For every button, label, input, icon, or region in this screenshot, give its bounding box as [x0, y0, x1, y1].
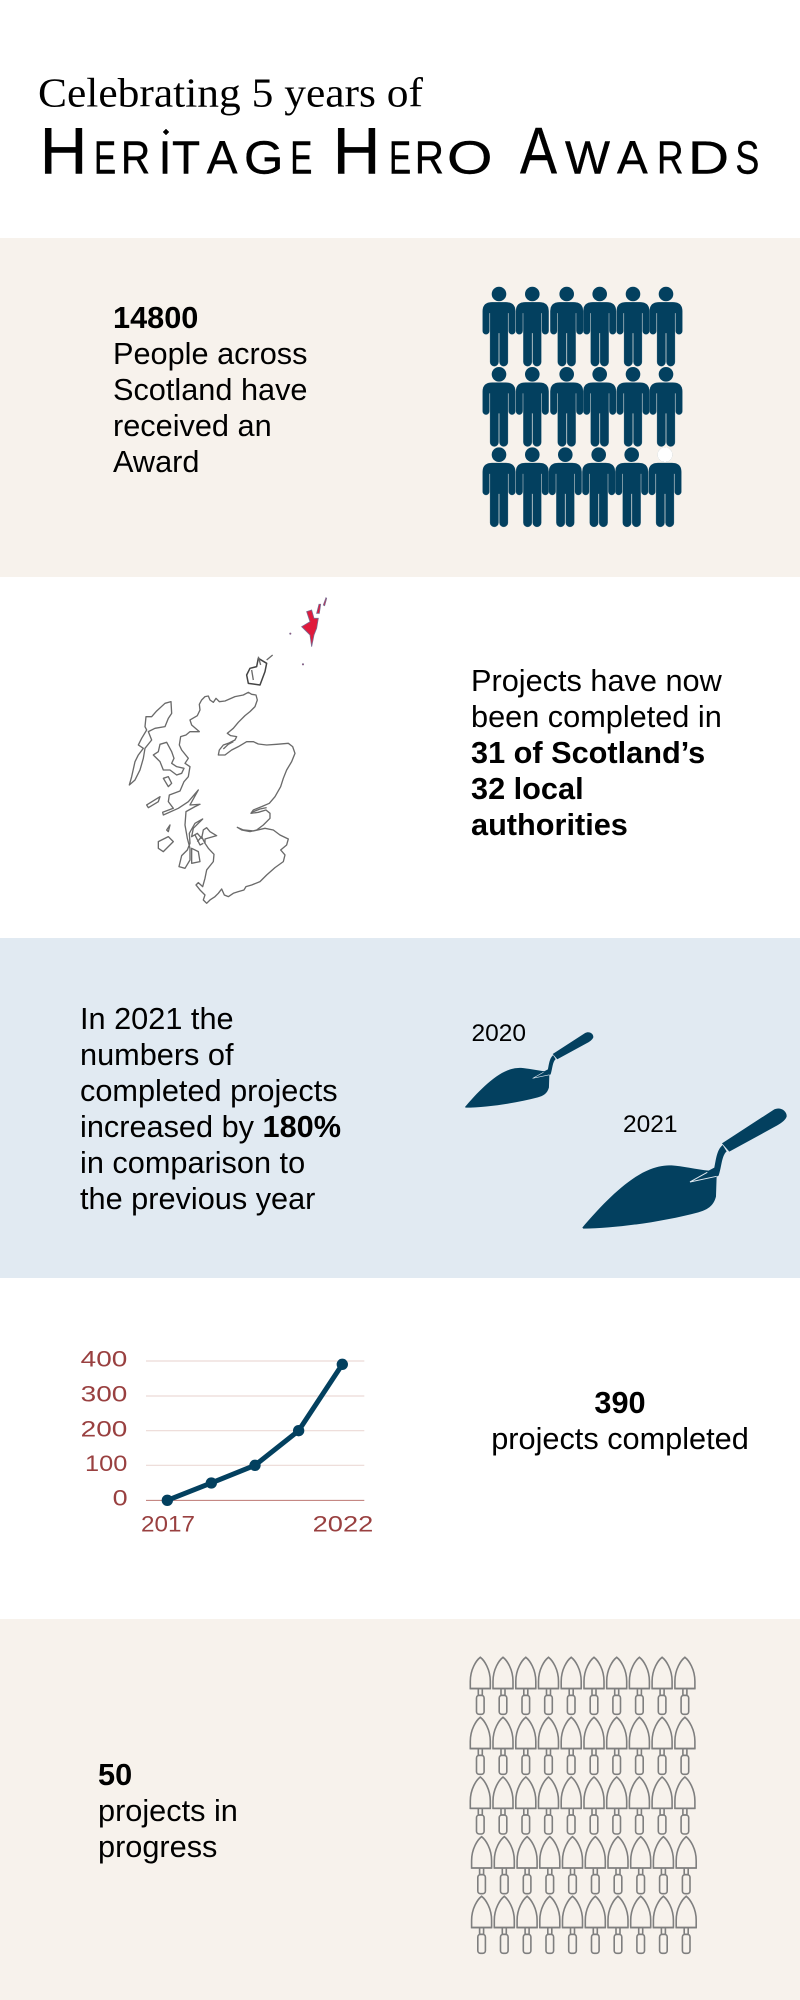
line chart: projects completed 2017 to 2022: 400 — [81, 1347, 127, 1372]
panel: completed increase background — [0, 938, 800, 1278]
line chart: projects completed 2017 to 2022: 300 — [81, 1382, 127, 1407]
title: Heritage Hero Awards: I — [159, 132, 172, 184]
line chart: projects completed 2017 to 2022: 200 — [81, 1416, 127, 1441]
text: local authorities: been completed in — [471, 699, 722, 734]
text: 50 projects in progress: projects in — [98, 1793, 238, 1828]
title: Heritage Hero Awards: A — [520, 114, 557, 188]
title: Celebrating 5 years of: Celebrating 5 years of — [38, 70, 423, 116]
title: Heritage Hero Awards: A — [207, 132, 238, 184]
panel: people reached background — [0, 238, 800, 577]
text: 14800 people: received an — [113, 408, 272, 443]
title: Heritage Hero Awards: R — [121, 132, 150, 184]
panel: projects in progress background — [0, 1619, 800, 2000]
title: Heritage Hero Awards: D — [688, 132, 729, 184]
text: local authorities: authorities — [471, 807, 628, 842]
label: 2021: 2021 — [623, 1111, 678, 1138]
title: Heritage Hero Awards: R — [657, 132, 684, 184]
text: local authorities: 31 of Scotland’s — [471, 735, 705, 770]
title: Heritage Hero Awards: O — [447, 132, 492, 184]
line chart: projects completed 2017 to 2022: 0 — [113, 1486, 128, 1511]
text: 390 projects completed — [491, 1385, 749, 1456]
text: 180% increase: completed projects — [80, 1073, 338, 1108]
text: 390 projects completed: 390 — [594, 1385, 646, 1420]
line chart: projects completed 2017 to 2022: 2017 — [141, 1512, 195, 1537]
title: Heritage Hero Awards: E — [94, 132, 116, 184]
text: 50 projects in progress: progress — [98, 1829, 217, 1864]
title: Heritage Hero Awards: R — [415, 132, 444, 184]
title: Heritage Hero Awards: A — [617, 132, 648, 184]
title: Heritage Hero Awards: H — [40, 114, 87, 188]
line chart: projects completed 2017 to 2022 — [81, 1347, 373, 1537]
text: 180% increase: increased by 180% — [80, 1109, 341, 1144]
line chart: projects completed 2017 to 2022: 100 — [85, 1451, 127, 1476]
text: 180% increase: in comparison to — [80, 1145, 305, 1180]
title: Heritage Hero Awards: E — [290, 132, 312, 184]
text: 180% increase — [80, 1001, 341, 1216]
text: 390 projects completed: projects completed — [491, 1421, 749, 1456]
text: 14800 people: 14800 — [113, 300, 198, 335]
text: 50 projects in progress — [98, 1757, 238, 1864]
text: 14800 people: Award — [113, 444, 199, 479]
map: Scotland outline with Shetland highlighted — [128, 597, 328, 904]
text: 180% increase: the previous year — [80, 1181, 315, 1216]
title: Heritage Hero Awards: S — [735, 132, 759, 184]
title: Heritage Hero Awards: E — [389, 132, 411, 184]
text: 14800 people: People across — [113, 336, 307, 371]
title: Heritage Hero Awards — [40, 114, 759, 188]
text: 14800 people — [113, 300, 308, 479]
title: Heritage Hero Awards: W — [565, 132, 611, 184]
text: 180% increase: numbers of — [80, 1037, 234, 1072]
text: 180% increase: In 2021 the — [80, 1001, 234, 1036]
title: Heritage Hero Awards: H — [333, 114, 380, 188]
label: 2020: 2020 — [472, 1020, 526, 1047]
text: local authorities: Projects have now — [471, 663, 722, 698]
text: local authorities — [471, 663, 722, 842]
title: Heritage Hero Awards: T — [172, 132, 200, 184]
line chart: projects completed 2017 to 2022: 2022 — [313, 1512, 373, 1537]
text: local authorities: 32 local — [471, 771, 584, 806]
title: Heritage Hero Awards: G — [244, 132, 283, 184]
text: 14800 people: Scotland have — [113, 372, 308, 407]
text: 50 projects in progress: 50 — [98, 1757, 132, 1792]
